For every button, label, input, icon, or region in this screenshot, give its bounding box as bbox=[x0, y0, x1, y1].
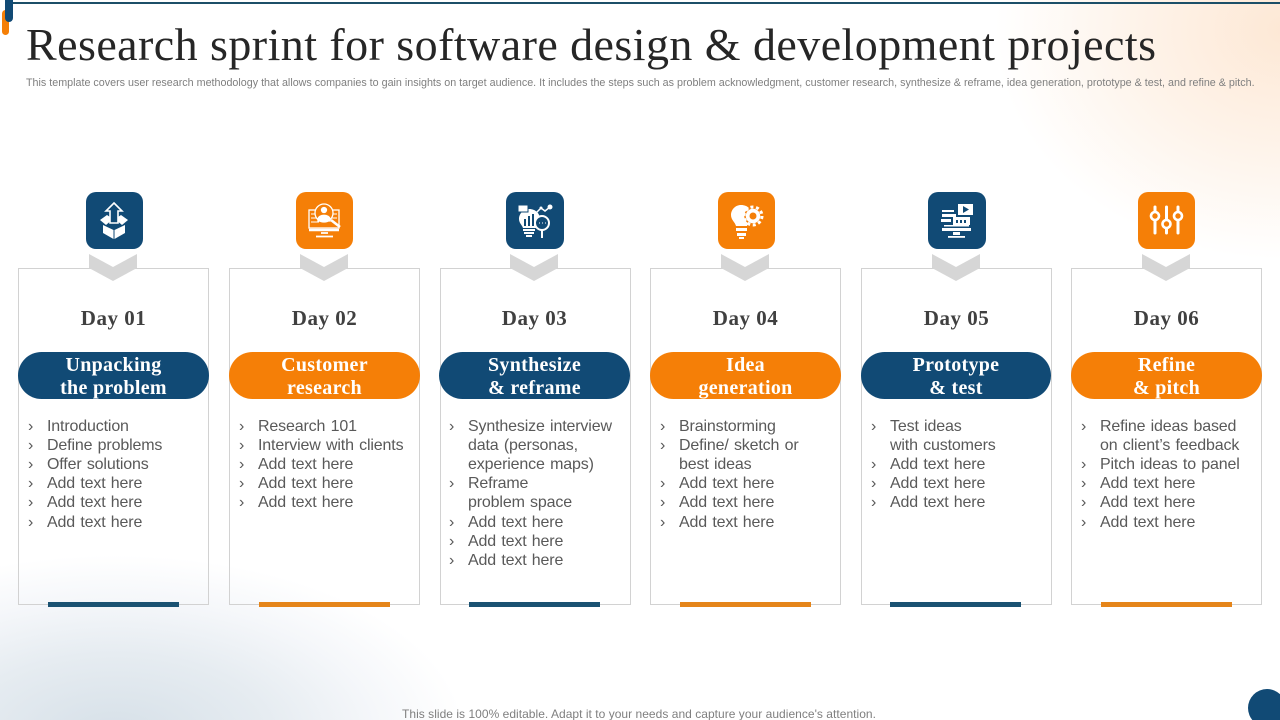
chevron bbox=[510, 254, 558, 281]
chevron bbox=[932, 254, 980, 281]
panel: day 02 bbox=[229, 192, 420, 607]
bullet list: Add text here bbox=[679, 494, 774, 511]
bullet list: Add text here bbox=[1100, 475, 1195, 492]
bullet list bbox=[872, 418, 996, 511]
pill heading: Synthesize bbox=[488, 354, 581, 376]
chevron bbox=[89, 254, 137, 281]
pill heading: & pitch bbox=[1133, 377, 1200, 399]
chevron bbox=[721, 254, 769, 281]
bullet list: Reframe bbox=[468, 475, 528, 492]
bullet list: Add text here bbox=[890, 494, 985, 511]
panel: day 01 bbox=[18, 192, 209, 607]
bullet list bbox=[1082, 418, 1240, 531]
bullet list: best ideas bbox=[679, 456, 751, 473]
icon: monitor with magnifier bbox=[296, 192, 353, 249]
bullet list: Add text here bbox=[258, 456, 353, 473]
corner accent: navy tab bbox=[5, 0, 13, 22]
bullet list: data (personas, bbox=[468, 437, 578, 454]
panel: day 06 bbox=[1071, 192, 1262, 607]
corner circle bbox=[1248, 689, 1280, 720]
pill heading bbox=[861, 352, 1051, 399]
bullet list: Add text here bbox=[890, 456, 985, 473]
bullet list: Add text here bbox=[258, 494, 353, 511]
bullet list: Interview with clients bbox=[258, 437, 403, 454]
pill heading bbox=[18, 352, 209, 399]
pill heading: Prototype bbox=[913, 354, 999, 376]
pill heading bbox=[229, 352, 420, 399]
pill heading bbox=[650, 352, 841, 399]
pill heading bbox=[439, 352, 630, 399]
bullet list: Add text here bbox=[258, 475, 353, 492]
accent bar bbox=[890, 602, 1021, 607]
bullet list bbox=[28, 418, 162, 531]
day label: Day 03 bbox=[502, 306, 567, 330]
day label: Day 04 bbox=[713, 306, 778, 330]
bullet list: Refine ideas based bbox=[1100, 418, 1236, 434]
bullet list: Define/ sketch or bbox=[679, 437, 799, 454]
bullet list: Pitch ideas to panel bbox=[1100, 456, 1240, 473]
bullet list: Test ideas bbox=[890, 418, 962, 434]
bullet list: Brainstorming bbox=[679, 418, 776, 434]
title: Research sprint for software design & development projects bbox=[26, 19, 1156, 70]
icon: light bulb and gear bbox=[718, 192, 775, 249]
day label: Day 01 bbox=[81, 306, 146, 330]
accent bar bbox=[259, 602, 390, 607]
subtitle: This template covers user research methodology that allows companies to gain insights on target audience. It includes the steps such as problem acknowledgment, customer research, synthesize & reframe, idea generation, prototype & test, and refine & pitch. bbox=[26, 77, 1255, 89]
accent bar bbox=[469, 602, 600, 607]
panel: day 04 bbox=[650, 192, 841, 607]
pill heading: & reframe bbox=[488, 377, 581, 399]
pill heading: research bbox=[287, 377, 362, 399]
panel: day 05 bbox=[861, 192, 1052, 607]
pill heading: generation bbox=[698, 377, 793, 399]
bullet list bbox=[240, 418, 403, 511]
bullet list: Add text here bbox=[47, 494, 142, 511]
bullet list: on client’s feedback bbox=[1100, 437, 1239, 454]
chevron bbox=[1142, 254, 1190, 281]
pill heading: Refine bbox=[1138, 354, 1195, 376]
bullet list: Add text here bbox=[679, 514, 774, 531]
icon: bulb, chart and magnifier bbox=[506, 192, 564, 249]
corner accent: orange tab bbox=[2, 10, 9, 35]
accent bar bbox=[1101, 602, 1232, 607]
icon: open box with arrow bbox=[86, 192, 143, 249]
icon: monitor with video panel bbox=[928, 192, 986, 249]
top rule bbox=[8, 2, 1280, 4]
bullet list: Add text here bbox=[47, 514, 142, 531]
pill heading bbox=[1071, 352, 1262, 399]
bullet list bbox=[450, 418, 612, 569]
bullet list: experience maps) bbox=[468, 456, 594, 473]
bullet list: Add text here bbox=[679, 475, 774, 492]
pill heading: Customer bbox=[281, 354, 368, 376]
bullet list: Introduction bbox=[47, 418, 129, 434]
bullet list: Add text here bbox=[468, 533, 563, 550]
bullet list: Define problems bbox=[47, 437, 162, 454]
bullet list: Research 101 bbox=[258, 418, 357, 434]
day label: Day 06 bbox=[1134, 306, 1199, 330]
bullet list: Add text here bbox=[1100, 514, 1195, 531]
bullet list: Add text here bbox=[47, 475, 142, 492]
bullet list: with customers bbox=[890, 437, 996, 454]
panel: day 03 bbox=[439, 192, 631, 607]
pill heading: the problem bbox=[60, 377, 167, 399]
pill heading: Unpacking bbox=[65, 354, 162, 376]
bullet list: Synthesize interview bbox=[468, 418, 612, 434]
accent bar bbox=[48, 602, 179, 607]
day label: Day 05 bbox=[924, 306, 989, 330]
bullet list: Add text here bbox=[468, 514, 563, 531]
icon: sliders bbox=[1138, 192, 1195, 249]
accent bar bbox=[680, 602, 811, 607]
bullet list bbox=[660, 418, 799, 531]
bullet list: Add text here bbox=[890, 475, 985, 492]
chevron bbox=[300, 254, 348, 281]
bullet list: problem space bbox=[468, 494, 572, 511]
bullet list: Offer solutions bbox=[47, 456, 149, 473]
pill heading: Idea bbox=[726, 354, 765, 376]
pill heading: & test bbox=[929, 377, 983, 399]
bullet list: Add text here bbox=[468, 552, 563, 569]
day label: Day 02 bbox=[292, 306, 357, 330]
bullet list: Add text here bbox=[1100, 494, 1195, 511]
